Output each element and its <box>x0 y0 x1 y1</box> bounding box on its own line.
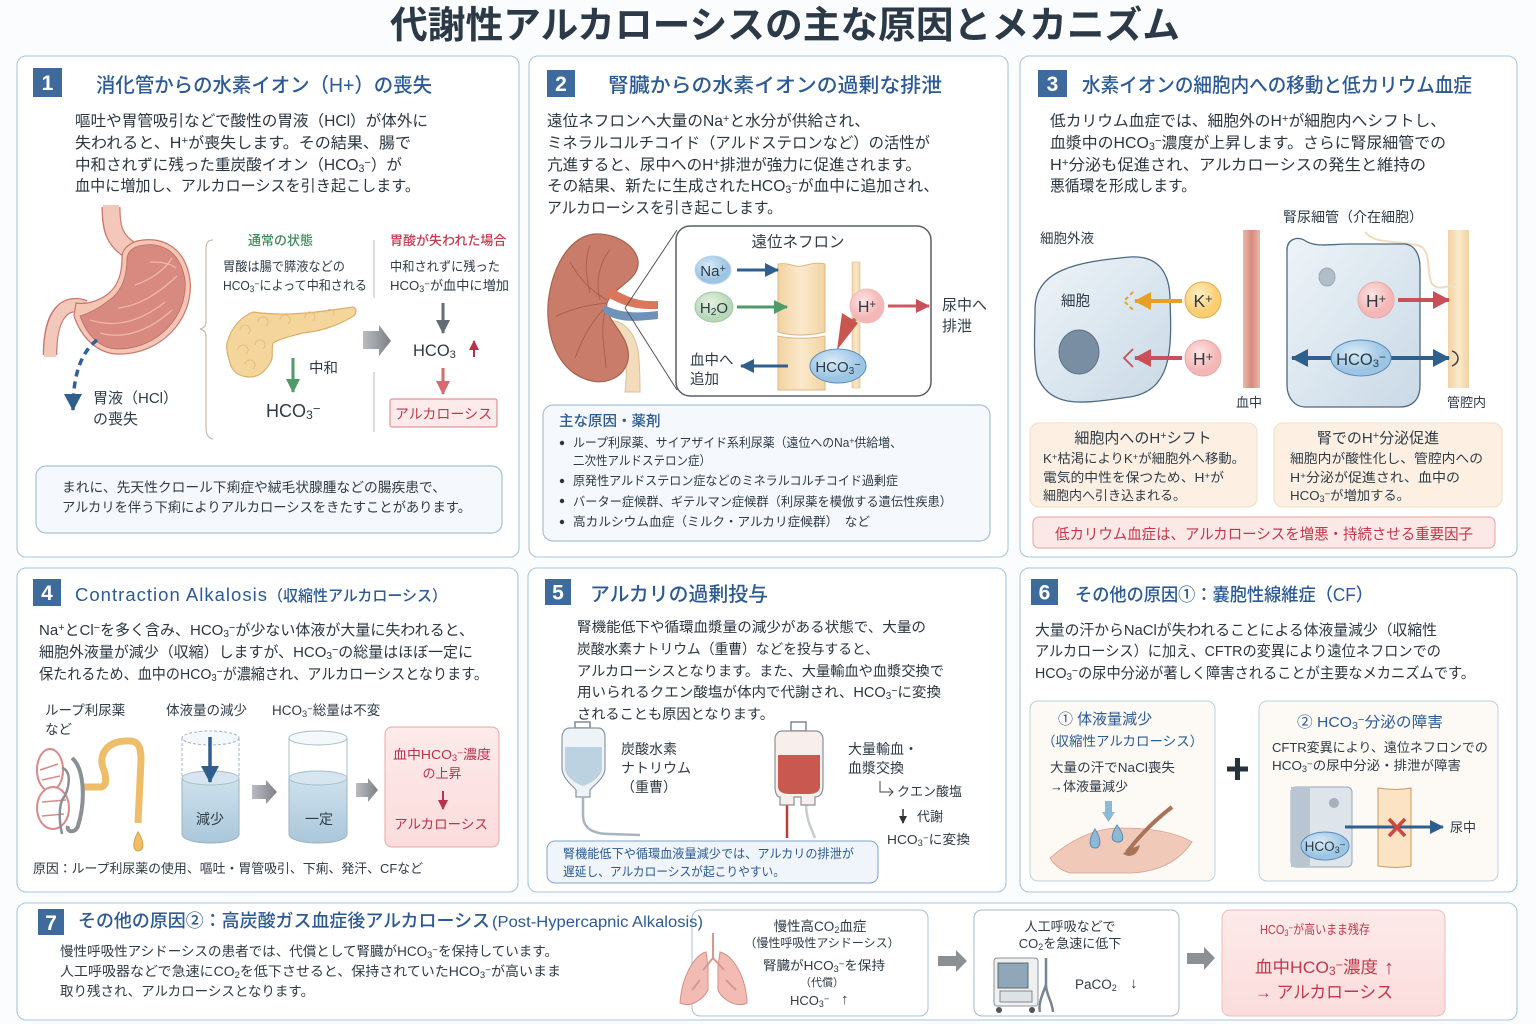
description 3: 血漿中のHCO3−濃度が上昇します。さらに腎尿細管での <box>1050 134 1446 153</box>
acid-lost text: 中和されずに残った <box>390 259 500 274</box>
description 3 <box>1050 112 1446 195</box>
arrow: gastric juice loss <box>73 340 97 410</box>
heading 3: 水素イオンの細胞内への移動と低カリウム血症 <box>1082 74 1472 97</box>
description 3: 悪循環を形成します。 <box>1050 177 1196 195</box>
normal state text: 胃酸は腸で膵液などの <box>223 259 345 274</box>
H+ ion: H+ <box>1193 349 1213 369</box>
number badge 7 <box>38 909 64 935</box>
cylinder: constant <box>289 731 347 843</box>
box: chronic hypercapnia <box>680 910 928 1016</box>
H+ arrow left <box>1124 349 1182 367</box>
H+ ion right <box>1358 282 1394 318</box>
H2O <box>695 292 733 322</box>
result box: の上昇 <box>422 766 462 781</box>
description 6: HCO3−の尿中分泌が著しく障害されることが主要なメカニズムです。 <box>1035 665 1475 683</box>
note 5: 遅延し、アルカローシスが起こりやすい。 <box>563 864 785 879</box>
heading 2: 腎臓からの水素イオンの過剰な排泄 <box>608 74 942 97</box>
HCO3 ellipse <box>810 349 866 383</box>
arrow: citrate <box>880 781 893 796</box>
causes list: 高カルシウム血症（ミルク・アルカリ症候群） など <box>573 514 870 529</box>
box text: CFTR変異により、遠位ネフロンでの <box>1272 740 1488 755</box>
heading 7: その他の原因②：高炭酸ガス血症後アルカローシス <box>78 911 490 931</box>
panel 6: cystic fibrosis <box>1020 568 1517 892</box>
title: 代謝性アルカローシスの主な原因とメカニズム <box>390 4 1180 46</box>
heading 4: （収縮性アルカローシス） <box>268 588 447 605</box>
number badge 5: 5 <box>552 582 564 604</box>
number badge 5 <box>545 579 571 605</box>
plus sign <box>1227 758 1248 780</box>
causes list: 原発性アルドステロン症などのミネラルコルチコイド過剰症 <box>573 474 898 488</box>
box text <box>744 918 900 1009</box>
heading 6: その他の原因①：嚢胞性線維症（CF） <box>1075 585 1373 605</box>
key point bar: 低カリウム血症は、アルカローシスを増悪・持続させる重要因子 <box>1055 526 1473 543</box>
acid-lost text: HCO3−が血中に増加 <box>390 278 509 294</box>
H+ arrow right <box>1398 298 1449 302</box>
cell <box>1291 787 1352 867</box>
arrow up <box>473 341 475 357</box>
box text: 人工呼吸などで <box>1025 919 1115 934</box>
arrow down <box>442 303 444 333</box>
H+ circle: H+ <box>858 299 876 316</box>
label: neutralization: 中和 <box>309 360 338 377</box>
box: renal H+ secretion: 細胞内が酸性化し、管腔内への <box>1290 451 1483 466</box>
icon: nephron <box>37 741 143 851</box>
blood label <box>690 352 734 388</box>
box text: 大量の汗でNaCl喪失 <box>1050 760 1175 775</box>
Na+ ion: Na+ <box>700 263 726 280</box>
description 5: 炭酸水素ナトリウム（重曹）などを投与すると、 <box>577 641 879 658</box>
icon: kidney <box>548 234 658 392</box>
number badge 2: 2 <box>555 73 567 96</box>
label: loop diuretics: など <box>45 722 72 737</box>
result box: アルカローシス <box>394 817 488 832</box>
alkalosis box <box>390 399 497 427</box>
divider <box>373 240 375 432</box>
label: gastric juice loss <box>93 390 178 428</box>
label: loop diuretics <box>45 703 125 737</box>
label: converted: HCO3−に変換 <box>887 832 970 848</box>
zoom lines <box>625 230 677 390</box>
box: H+ shift: K+枯渇によりK+が細胞外へ移動。 <box>1043 451 1245 466</box>
description 1: 中和されずに残った重炭酸イオン（HCO3−）が <box>75 156 402 175</box>
label: gastric juice loss: の喪失 <box>93 410 138 428</box>
urine label: 尿中へ <box>942 297 987 314</box>
icon: ventilator <box>994 958 1053 1013</box>
bicarbonate arrows <box>1292 351 1458 366</box>
nucleus <box>1319 268 1335 286</box>
normal state column <box>223 233 367 422</box>
description 2: 亢進すると、尿中へのH+排泄が強力に促進されます。 <box>547 156 921 174</box>
arrow <box>938 950 967 972</box>
causes list <box>560 436 952 529</box>
box: ventilation <box>974 910 1179 1016</box>
causes list: 二次性アルドステロン症） <box>573 454 711 468</box>
heading 1: 消化管からの水素イオン（H+）の喪失 <box>96 74 432 97</box>
box text <box>1019 919 1121 952</box>
arrow <box>356 778 378 802</box>
box: result: ↑ <box>1384 957 1394 979</box>
box: volume depletion <box>1030 701 1215 881</box>
box heading <box>1042 711 1203 749</box>
label: sodium bicarbonate <box>621 741 691 795</box>
box: secretion impairment <box>1259 701 1498 881</box>
label: transfusion <box>848 741 918 776</box>
label: gastric juice loss: 胃液（HCl） <box>93 390 178 407</box>
number badge 6: 6 <box>1039 582 1050 604</box>
note 5: 腎機能低下や循環血液量減少では、アルカリの排泄が <box>563 846 854 861</box>
normal state text <box>223 259 367 294</box>
inset title: 遠位ネフロン <box>751 233 845 251</box>
label: sodium bicarbonate: ナトリウム <box>621 760 691 776</box>
description 2: ミネラルコルチコイド（アルドステロンなど）の活性が <box>547 134 930 152</box>
description 2: アルカローシスを引き起こします。 <box>547 199 782 217</box>
heading 5: アルカリの過剰投与 <box>590 583 768 606</box>
box heading: ② HCO3−分泌の障害 <box>1297 714 1443 732</box>
icon: bicarbonate IV bag <box>562 722 640 835</box>
note 1 <box>36 466 502 533</box>
acid-lost heading: 胃酸が失われた場合 <box>390 233 506 248</box>
icon: pancreas <box>227 307 356 377</box>
arrow: neutralization <box>292 358 294 392</box>
tubule <box>778 262 860 390</box>
HCO3 right: HCO3− <box>1336 350 1386 370</box>
number badge 1 <box>33 68 62 97</box>
description 4: 細胞外液量が減少（収縮）しますが、HCO3−の総量はほぼ一定に <box>39 644 473 662</box>
Na+ ion <box>695 256 731 284</box>
description 5: 腎機能低下や循環血漿量の減少がある状態で、大量の <box>577 619 926 636</box>
label: cell: 細胞 <box>1061 293 1090 310</box>
description 4 <box>39 621 488 684</box>
description 4: Na+とCl−を多く含み、HCO3−が少ない体液が大量に失われると、 <box>39 621 474 640</box>
label: sodium bicarbonate: 炭酸水素 <box>621 741 677 757</box>
acid-lost column <box>390 233 509 427</box>
description 1: 嘔吐や胃管吸引などで酸性の胃液（HCl）が体外に <box>75 112 428 130</box>
description 4: 保たれるため、血中のHCO3−が濃縮され、アルカローシスとなります。 <box>39 666 488 684</box>
description 5: 用いられるクエン酸塩が体内で代謝され、HCO 3−に変換 <box>577 684 941 702</box>
H2O: H2O <box>700 300 728 318</box>
result box <box>385 727 499 847</box>
K+ ion: K+ <box>1193 291 1213 311</box>
tubule <box>1378 788 1411 868</box>
icon: lungs <box>680 933 747 1005</box>
label: metabolism: 代謝 <box>917 809 943 824</box>
H+ ion right: H+ <box>1366 291 1386 311</box>
description 7: 慢性呼吸性アシドーシスの患者では、代償として腎臓がHCO3−を保持しています。 <box>60 943 558 960</box>
number badge 2 <box>547 70 575 97</box>
H+ circle <box>850 289 884 323</box>
urine label <box>942 297 987 335</box>
box: renal H+ secretion: 腎でのH+分泌促進 <box>1317 430 1439 447</box>
key point bar <box>1033 517 1495 548</box>
label: blood: 血中 <box>1236 395 1262 410</box>
number badge 1: 1 <box>42 72 54 95</box>
number badge 7: 7 <box>45 912 57 935</box>
panel 5: alkali overdose <box>528 568 1006 892</box>
label: PaCO2: PaCO2 <box>1075 977 1117 993</box>
label: PaCO2 <box>1075 975 1138 993</box>
inset: distal nephron <box>676 226 987 396</box>
description 1 <box>75 112 428 195</box>
box: result <box>1222 910 1445 1016</box>
heading 7 <box>78 911 703 931</box>
cylinder: decreased: 減少 <box>196 811 224 827</box>
panel 4: contraction alkalosis <box>17 568 518 892</box>
connector line <box>1365 232 1456 288</box>
K+ arrow <box>1124 292 1182 310</box>
brace <box>200 240 213 439</box>
description 7 <box>60 943 561 999</box>
box: renal H+ secretion <box>1274 423 1502 507</box>
heading 4 <box>75 584 447 605</box>
number badge 3: 3 <box>1047 73 1058 96</box>
box: H+ shift: 電気的中性を保つため、H +が <box>1043 470 1224 485</box>
box text: （代償） <box>800 975 844 989</box>
label: lumen: 管腔内 <box>1447 395 1486 410</box>
note 1: まれに、先天性クロール下痢症や絨毛状腺腫などの腸疾患で、 <box>62 480 446 495</box>
arrow H2O <box>737 306 787 308</box>
urine label: 排泄 <box>942 318 972 335</box>
alkalosis box: アルカローシス <box>395 406 492 422</box>
arrow to urine <box>888 304 929 308</box>
tubular lumen <box>1448 230 1469 388</box>
box text: HCO3−の尿中分泌・排泄が障害 <box>1272 758 1461 774</box>
box heading: ① 体液量減少 <box>1058 711 1152 728</box>
number badge 3 <box>1038 70 1067 97</box>
box: renal H+ secretion: H+分泌が促進され、血中の <box>1290 470 1460 485</box>
box text: CO2を急速に低下 <box>1019 936 1121 952</box>
acid-lost text <box>390 259 509 294</box>
description 3: H+分泌も促進され、アルカローシスの発生と維持の <box>1050 156 1426 174</box>
heading 4: Contraction Alkalosis <box>75 584 267 605</box>
number badge 6 <box>1031 579 1058 605</box>
box: H+ shift <box>1030 423 1257 507</box>
HCO3 right <box>1331 340 1391 376</box>
cylinder: decreased <box>182 731 239 843</box>
description 5 <box>577 619 944 723</box>
normal state text: HCO3−によって中和される <box>223 278 367 294</box>
description 1: 失われると、H +が喪失します。その結果、腸で <box>75 134 411 152</box>
arrow <box>1187 947 1215 970</box>
panel 2: renal hydrogen excretion <box>529 56 1008 557</box>
description 6: アルカローシス）に加え、CFTRの変異により遠位ネフロンでの <box>1035 643 1441 660</box>
description 2: その結果、新たに生成されたHCO3−が血中に追加され、 <box>547 177 939 196</box>
box text: →体液量減少 <box>1050 779 1128 794</box>
triangle arrow H+ to HCO3 <box>837 310 866 350</box>
icon: sweat on skin <box>1050 801 1192 873</box>
normal state heading: 通常の状態 <box>248 233 313 248</box>
description 6: 大量の汗からNaClが失われることによる体液量減少（収縮性 <box>1035 622 1437 639</box>
box: result: 血中HCO3−濃度 <box>1255 958 1378 978</box>
label: HCO3 total unchanged: HCO3−総量は不変 <box>272 703 380 719</box>
result box: 血中HCO 3−濃度 <box>393 747 491 763</box>
box: result: → アルカローシス <box>1255 983 1393 1002</box>
HCO3 ellipse <box>1301 832 1349 860</box>
description 5: アルカローシスとなります。また、大量輸血や血漿交換で <box>577 663 944 680</box>
box text: （慢性呼吸性アシドーシス） <box>744 936 900 950</box>
box: renal H+ secretion: HCO3−が増加する。 <box>1290 488 1410 504</box>
H+ ion <box>1185 340 1221 376</box>
label: HCO3: HCO3 <box>413 342 456 361</box>
arrow to blood <box>741 364 788 368</box>
description 2: 遠位ネフロンへ大量のNa+と水分が供給され、 <box>547 112 870 130</box>
description 6 <box>1035 622 1475 683</box>
box: H+ shift: 細胞内へ引き込まれる。 <box>1043 488 1186 503</box>
blood label: 血中へ <box>690 352 734 369</box>
K+ ion <box>1185 282 1221 318</box>
label: PaCO2: ↓ <box>1130 975 1138 992</box>
description 5: されることも原因となります。 <box>577 706 774 723</box>
block arrow <box>363 325 391 356</box>
right cell <box>1287 238 1420 407</box>
label: sodium bicarbonate: （重曹） <box>621 779 677 795</box>
icon: blood bag <box>775 722 823 838</box>
label: volume decrease: 体液量の減少 <box>166 702 247 718</box>
description 3: 低カリウム血症では、細胞外のH+が細胞内へシフトし、 <box>1050 112 1446 130</box>
panel 7: post-hypercapnic alkalosis <box>17 903 1517 1020</box>
cylinder: constant: 一定 <box>305 811 333 827</box>
label: bicarbonate: HCO3− <box>266 401 320 422</box>
arrow: metabolism <box>902 809 904 823</box>
causes list: バーター症候群、ギテルマン症候群（利尿薬を模倣する遺伝性疾患） <box>573 495 952 509</box>
number badge 4 <box>33 579 61 606</box>
label: tubule: 腎尿細管（介在細胞） <box>1283 209 1423 225</box>
icon: stomach <box>50 205 190 357</box>
blocked arrow <box>1345 819 1443 836</box>
label: citrate: クエン酸塩 <box>897 784 962 799</box>
HCO3 ellipse: HCO3− <box>815 359 861 377</box>
arrow down pink <box>442 368 444 394</box>
label: transfusion: 血漿交換 <box>848 760 904 776</box>
label: loop diuretics: ループ利尿薬 <box>45 703 125 718</box>
arrow <box>252 780 277 804</box>
left cell <box>1034 257 1171 402</box>
description 7: 取り残され、アルカローシスとなります。 <box>60 984 314 999</box>
note 5 <box>547 841 878 883</box>
panel 3: intracellular hydrogen shift and hypokalemia <box>1020 56 1517 557</box>
box text: HCO3− <box>790 993 829 1009</box>
nucleus <box>1059 330 1099 374</box>
label: transfusion: 大量輸血・ <box>848 741 918 757</box>
box text: 腎臓がHCO 3−を保持 <box>763 958 885 974</box>
note 1: アルカリを伴う下痢によりアルカローシスをきたすことがあります。 <box>62 500 471 515</box>
causes heading: 主な原因・薬剤 <box>559 413 660 430</box>
label: extracellular fluid: 細胞外液 <box>1040 231 1094 246</box>
causes list: ループ利尿薬、サイアザイド系利尿薬（遠位へのNa+供給増、 <box>573 436 902 450</box>
description 2 <box>547 112 939 217</box>
box: H+ shift: 細胞内へのH+シフト <box>1074 430 1212 447</box>
box text <box>1050 760 1175 794</box>
HCO3 ellipse: HCO3− <box>1305 839 1346 855</box>
blood label: 追加 <box>690 371 719 388</box>
box heading: （収縮性アルカローシス） <box>1042 734 1203 749</box>
box text: 慢性高CO2血症 <box>774 918 866 935</box>
causes line: 原因：ループ利尿薬の使用、嘔吐・胃管吸引、下痢、発汗、CFなど <box>33 861 423 876</box>
box text: ↑ <box>841 991 848 1008</box>
description 1: 血中に増加し、アルカローシスを引き起こします。 <box>75 177 420 195</box>
box text <box>1272 740 1488 774</box>
label: urine: 尿中 <box>1450 820 1476 835</box>
description 7: 人工呼吸器などで急速にCO 2を低下させると、保持されていたHCO 3−が高いまま <box>60 963 561 980</box>
arrow Na+ <box>737 268 778 272</box>
heading 7: (Post-Hypercapnic Alkalosis) <box>492 914 703 931</box>
blood vessel <box>1243 230 1260 388</box>
panel 1: gastrointestinal hydrogen ion loss <box>17 56 519 557</box>
number badge 4: 4 <box>41 582 53 605</box>
causes box <box>543 405 990 541</box>
box: result: HCO3−が高いまま残存 <box>1260 922 1370 938</box>
